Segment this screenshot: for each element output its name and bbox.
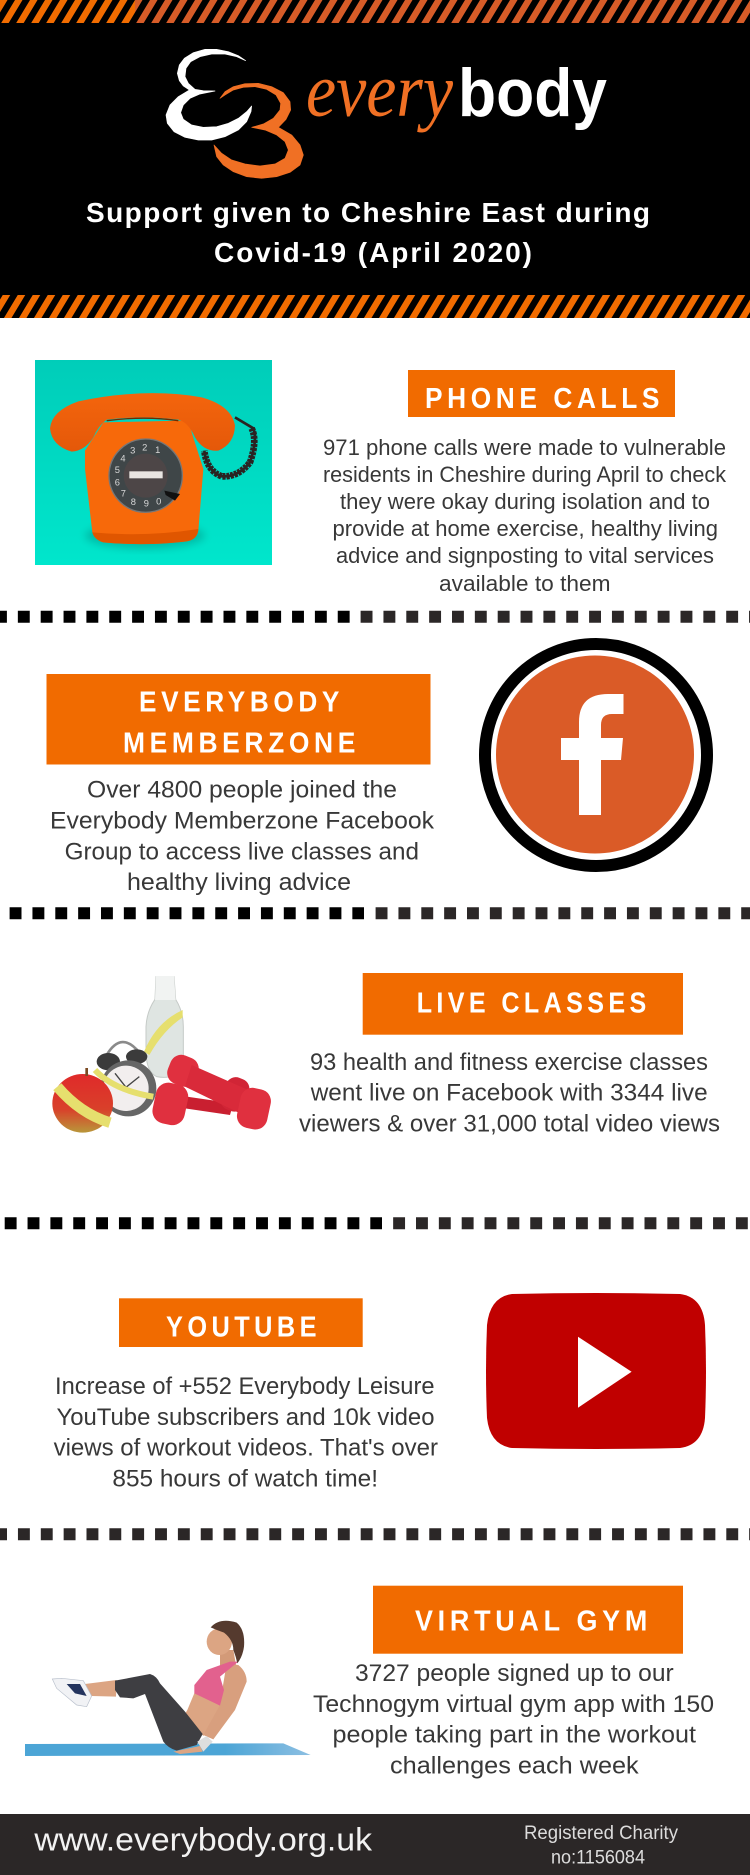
panel: everybody memberzone — [46, 644, 707, 896]
icon: orange rotary telephone: 5 — [115, 465, 120, 475]
icon: youtube play button — [486, 1293, 706, 1449]
charity number — [524, 1823, 678, 1868]
icon: facebook — [485, 644, 707, 866]
heading: youtube: YOUTUBE — [166, 1312, 321, 1344]
heading: phone calls — [408, 370, 675, 417]
heading: youtube — [119, 1298, 363, 1347]
text: phone calls description: residents in Cheshire during April to check — [323, 462, 727, 487]
logo word: body: body — [458, 55, 607, 131]
heading: everybody memberzone: MEMBERZONE — [123, 728, 360, 760]
text: phone calls description: available to them — [439, 571, 610, 596]
heading: everybody memberzone — [46, 674, 430, 764]
heading: live classes — [363, 973, 683, 1035]
text: phone calls description — [323, 435, 727, 596]
icon: orange rotary telephone: 9 — [144, 499, 149, 509]
icon: orange rotary telephone: 3 — [130, 445, 135, 455]
panel: virtual gym — [25, 1586, 714, 1779]
bottom hazard stripes — [0, 295, 750, 318]
icon: woman exercising on mat — [25, 1621, 311, 1756]
icon: orange rotary telephone: 7 — [121, 488, 126, 498]
icon: orange rotary telephone — [35, 360, 272, 565]
panel: youtube — [54, 1293, 706, 1493]
text: virtual gym description: 3727 people signed up to our — [355, 1660, 674, 1687]
text: memberzone description — [50, 776, 435, 896]
text: youtube description: 855 hours of watch time! — [112, 1466, 378, 1493]
text: phone calls description: they were okay during isolation and to — [340, 489, 710, 514]
panel: footer — [0, 1814, 750, 1875]
text: live classes description: 93 health and fitness exercise classes — [310, 1049, 708, 1076]
text: memberzone description: Everybody Memberzone Facebook — [50, 808, 435, 834]
icon: orange rotary telephone: 4 — [120, 454, 126, 464]
text: phone calls description: provide at home exercise, healthy living — [332, 516, 718, 541]
text: virtual gym description: Technogym virtual gym app with 150 — [313, 1691, 714, 1718]
icon: orange rotary telephone: 0 — [156, 496, 161, 506]
heading: phone calls: PHONE CALLS — [425, 383, 664, 415]
panel: header — [0, 0, 750, 318]
text: live classes description: went live on Facebook with 3344 live — [310, 1080, 708, 1107]
text: youtube description: views of workout videos. That's over — [54, 1435, 438, 1462]
icon: orange rotary telephone: 8 — [131, 497, 136, 507]
icon: apple, clock, water bottle and dumbbells — [52, 976, 273, 1133]
heading: virtual gym: VIRTUAL GYM — [415, 1606, 652, 1638]
text: virtual gym description — [313, 1660, 714, 1779]
title — [86, 197, 650, 268]
title: Covid-19 (April 2020) — [214, 237, 532, 268]
text: phone calls description: advice and signposting to vital services — [336, 543, 714, 568]
text: memberzone description: healthy living advice — [127, 869, 351, 896]
icon: orange rotary telephone: 1 — [155, 445, 160, 455]
text: virtual gym description: people taking part in the workout — [332, 1722, 696, 1749]
icon: orange rotary telephone: 2 — [142, 443, 147, 453]
text: youtube description: Increase of +552 Everybody Leisure — [55, 1373, 434, 1400]
title: Support given to Cheshire East during — [86, 197, 650, 228]
heading: everybody memberzone: EVERYBODY — [139, 686, 344, 718]
charity number: Registered Charity — [524, 1823, 678, 1844]
text: phone calls description: 971 phone calls were made to vulnerable — [323, 435, 726, 460]
charity number: no:1156084 — [551, 1847, 645, 1868]
text: memberzone description: Group to access live classes and — [65, 838, 419, 865]
text: live classes description: viewers & over 31,000 total video views — [299, 1111, 720, 1138]
text: live classes description — [299, 1049, 720, 1138]
text: virtual gym description: challenges each week — [390, 1752, 639, 1779]
panel: phone calls — [35, 360, 727, 596]
top hazard stripes — [0, 0, 750, 23]
logo word: every: every — [306, 49, 453, 133]
panel: live classes — [52, 973, 720, 1138]
heading: live classes: LIVE CLASSES — [417, 988, 651, 1020]
icon: orange rotary telephone: 6 — [115, 477, 120, 487]
text: youtube description — [54, 1373, 438, 1493]
logo: everybody — [166, 49, 607, 178]
heading: virtual gym — [373, 1586, 683, 1654]
text: memberzone description: Over 4800 people joined the — [87, 776, 397, 804]
text: youtube description: YouTube subscribers and 10k video — [56, 1404, 434, 1431]
website url: www.everybody.org.uk — [33, 1822, 373, 1858]
